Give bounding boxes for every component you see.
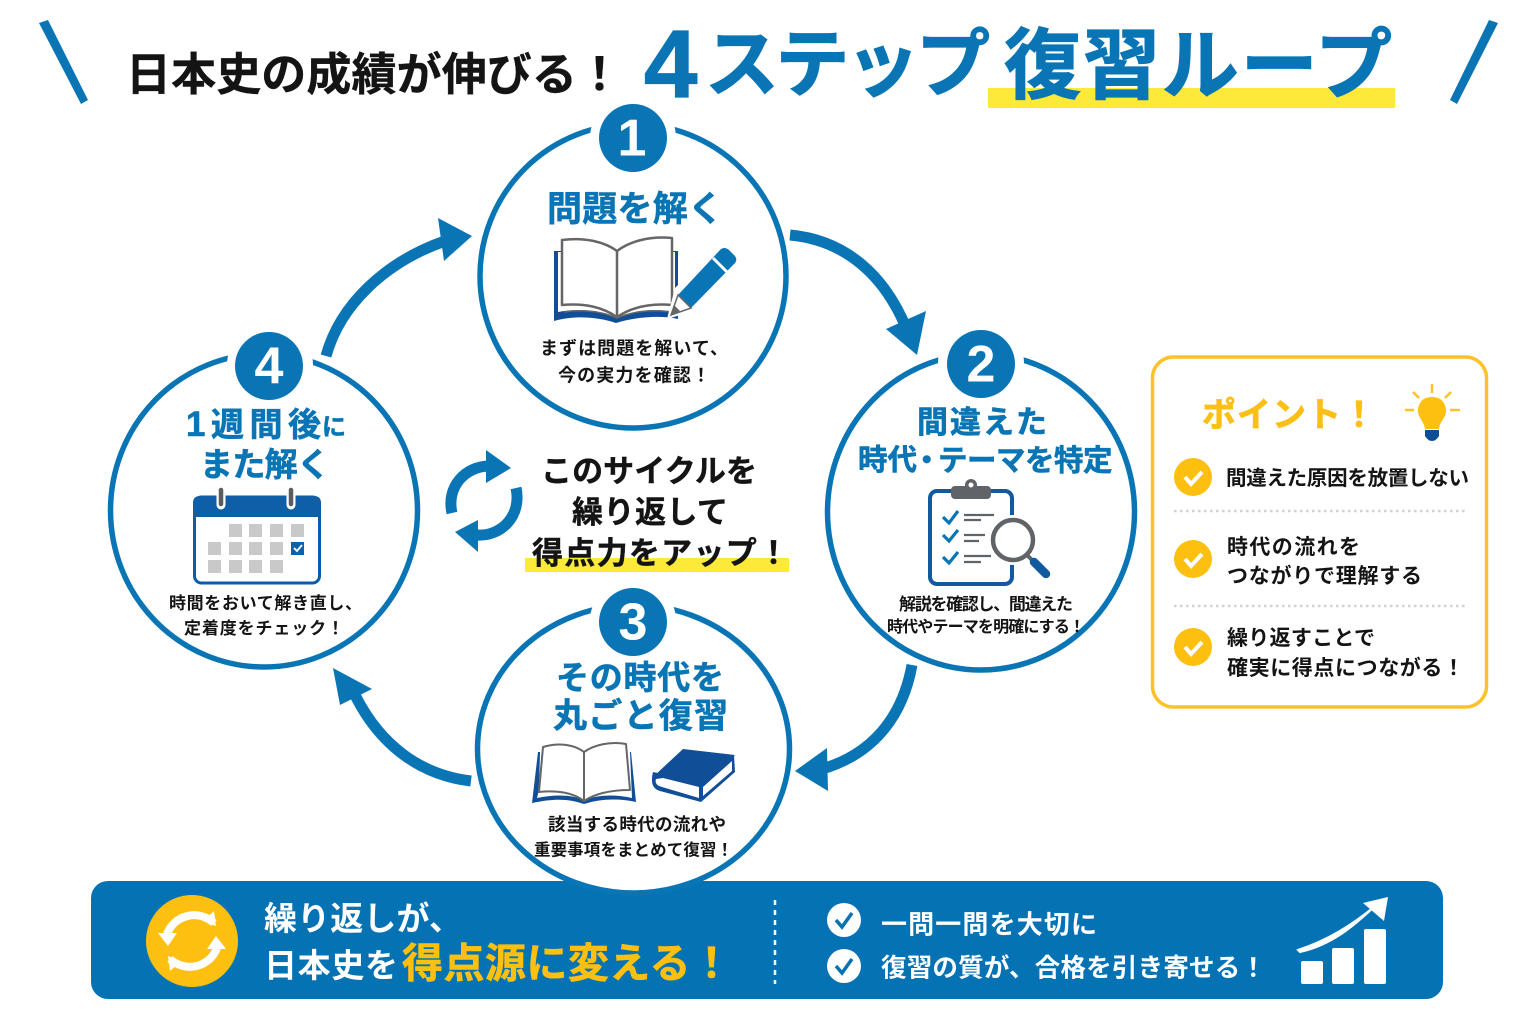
banner: [91, 881, 1443, 999]
description step 1: 今の実力を確認！: [558, 364, 710, 386]
title 復習ループ: 復習ループ: [1004, 24, 1392, 110]
heading: 間違えた 時代・テーマを特定: [858, 405, 1112, 477]
panel: point: [1152, 357, 1486, 707]
banner dashed divider: [774, 900, 776, 984]
description step 2: 時代やテーマを明確にする！: [887, 617, 1085, 636]
panel: step 3: [478, 578, 790, 893]
point item 1: [1174, 458, 1469, 496]
heading: その時代を 丸ごと復習: その時代を: [556, 659, 724, 696]
point item 1: 間違えた原因を放置しない: [1226, 467, 1469, 490]
arrow: step 1 to step 2: [790, 235, 926, 355]
description step 2: [887, 594, 1085, 636]
heading: 間違えた 時代・テーマを特定: ・: [912, 444, 942, 477]
icon: open book and pencil: [554, 238, 744, 323]
title number 4: 4: [644, 11, 697, 118]
badge 1: [599, 104, 667, 172]
yellow underline: [988, 88, 1395, 108]
title slash left: [39, 20, 88, 104]
yellow highlight: [525, 558, 789, 572]
icon: light bulb: [1405, 384, 1460, 441]
heading: その時代を 丸ごと復習: 丸ごと復習: [553, 698, 728, 736]
heading: その時代を 丸ごと復習: [553, 659, 728, 736]
center text: 得点力をアップ！: [532, 536, 789, 571]
heading: 1週間後に また解く: [186, 405, 346, 483]
title lead text: 日本史の成績が伸びる！: [126, 49, 622, 100]
icon: clipboard and magnifier: [930, 479, 1046, 584]
badge 2: [947, 330, 1015, 398]
heading: 問題を解く: 問題を解く: [547, 190, 723, 229]
heading: 1週間後に また解く: また解く: [200, 446, 330, 483]
badge 1: 1: [618, 110, 646, 168]
description step 3: [534, 814, 733, 860]
heading: 間違えた 時代・テーマを特定: テーマを特定: [938, 444, 1112, 477]
arrow: step 2 to step 3: [795, 665, 912, 791]
point item 3: 繰り返すことで: [1227, 627, 1375, 650]
icon: open book: [532, 743, 636, 804]
icon: calendar: [193, 489, 321, 583]
heading: 1週間後に また解く: 1: [186, 405, 205, 444]
banner headline: [264, 900, 732, 986]
badge 3: 3: [619, 594, 647, 652]
banner headline: 繰り返しが、: [264, 900, 462, 937]
center text: このサイクルを: [541, 454, 757, 489]
description step 3: 該当する時代の流れや: [548, 814, 726, 834]
heading: 間違えた 時代・テーマを特定: 時代: [858, 444, 917, 477]
description step 3: 重要事項をまとめて復習！: [534, 840, 733, 860]
icon: yellow repeat circle: [146, 895, 238, 987]
point heading: ポイント！: [1202, 396, 1376, 434]
point item 2: つながりで理解する: [1227, 564, 1422, 588]
point item 2: [1174, 536, 1422, 588]
title slash right: [1450, 20, 1498, 104]
title: [39, 11, 1498, 118]
banner check 1: 一問一問を大切に: [881, 910, 1097, 940]
center message: [451, 450, 789, 572]
description step 4: [169, 594, 362, 638]
banner headline: 得点源に変える！: [402, 940, 732, 986]
banner check 1: [827, 903, 1097, 940]
icon: cycle arrows: [451, 450, 517, 552]
icon: rising bar chart: [1298, 897, 1388, 984]
panel: step 2: [828, 320, 1134, 670]
description step 4: 定着度をチェック！: [184, 618, 344, 638]
badge 4: 4: [255, 338, 284, 396]
center text: [532, 454, 789, 571]
description step 1: まずは問題を解いて、: [540, 338, 728, 358]
arrow: step 3 to step 4: [333, 668, 471, 781]
title ステップ: ステップ: [705, 23, 990, 106]
point item 3: 確実に得点につながる！: [1227, 656, 1464, 680]
description step 2: 解説を確認し、間違えた: [899, 594, 1073, 614]
banner headline: 日本史を: [264, 947, 398, 984]
panel: step 4: [110, 322, 418, 667]
heading: 1週間後に また解く: に: [322, 414, 346, 441]
badge 2: 2: [967, 336, 995, 394]
point item 3: [1174, 627, 1464, 680]
arrow: step 4 to step 1: [326, 218, 472, 356]
divider dots: [1174, 605, 1466, 607]
badge 3: [599, 588, 667, 656]
icon: closed book: [652, 749, 735, 802]
point item 2: 時代の流れを: [1227, 536, 1360, 559]
heading: 間違えた 時代・テーマを特定: 間違えた: [917, 405, 1047, 440]
badge 4: [235, 332, 303, 400]
panel: step 1: [480, 95, 786, 428]
description step 1: [540, 338, 728, 386]
center text: 繰り返して: [572, 495, 728, 530]
divider dots: [1174, 510, 1466, 512]
description step 4: 時間をおいて解き直し、: [169, 594, 362, 613]
heading: 1週間後に また解く: 週間後: [211, 406, 321, 443]
banner check 2: 復習の質が、合格を引き寄せる！: [881, 954, 1266, 982]
